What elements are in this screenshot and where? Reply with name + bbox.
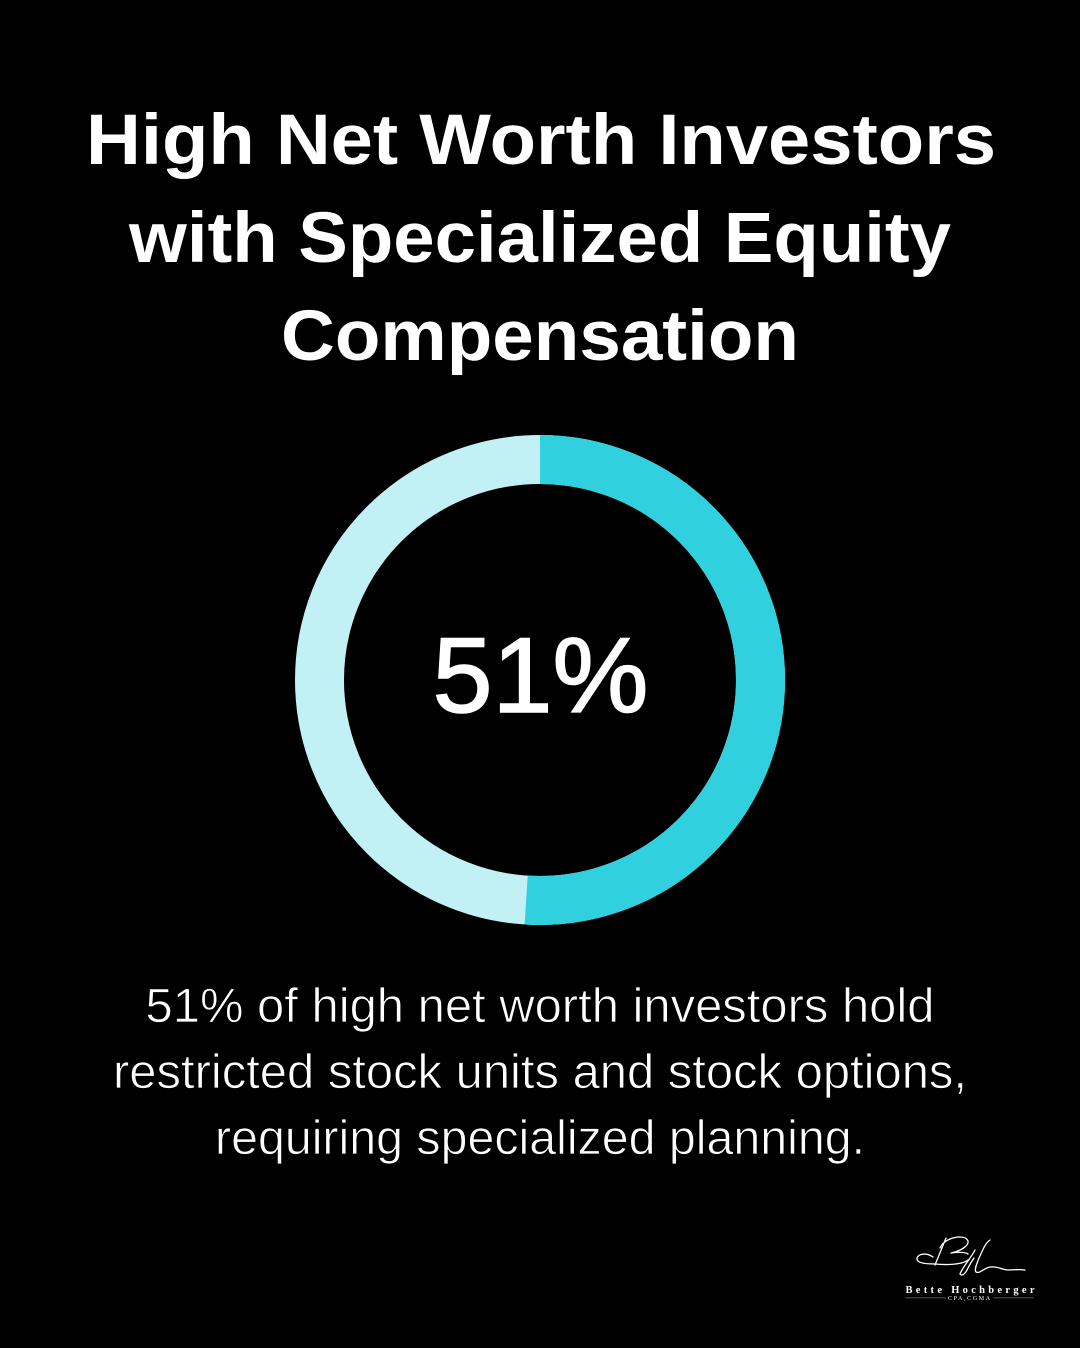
description text: restricted stock units and stock options,	[113, 1046, 967, 1099]
description text	[113, 980, 967, 1165]
logo signature	[917, 1237, 1025, 1275]
donut chart: 51%	[320, 460, 761, 900]
logo name: Bette Hochberger	[906, 1285, 1035, 1296]
logo: Bette Hochberger	[905, 1237, 1035, 1302]
title: with Specialized Equity	[128, 199, 952, 278]
donut value: 51%	[432, 615, 648, 735]
title: Compensation	[281, 297, 799, 376]
title: High Net Worth Investors	[86, 101, 996, 180]
logo credentials: CPA,CGMA	[948, 1296, 991, 1302]
description text: requiring specialized planning.	[215, 1112, 865, 1165]
description text: 51% of high net worth investors hold	[146, 980, 935, 1033]
title	[86, 101, 996, 376]
